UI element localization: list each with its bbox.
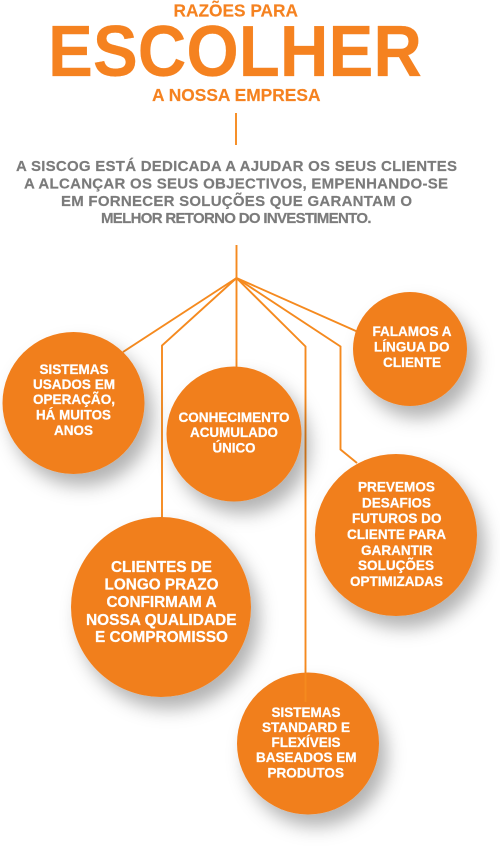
node: clientes de longo prazo [71,517,251,697]
node: clientes de longo prazo: CONFIRMAM A [106,594,216,611]
intro text block: EM FORNECER SOLUÇÕES QUE GARANTAM O [61,192,412,210]
node: sistemas usados em operação: ANOS [54,423,93,438]
node: clientes de longo prazo: CLIENTES DE [111,559,212,576]
title line: razões para: RAZÕES PARA [174,0,298,20]
node: conhecimento acumulado único: ÚNICO [212,440,256,456]
node: clientes de longo prazo: LONGO PRAZO [104,576,218,594]
node: sistemas usados em operação: OPERAÇÃO, [33,392,115,407]
node: sistemas standard e flexíveis: BASEADOS EM [256,750,356,765]
intro text block: MELHOR RETORNO DO INVESTIMENTO. [101,210,372,227]
node: prevemos desafios: SOLUÇÕES [358,556,434,573]
node: prevemos desafios: CLIENTE PARA [347,526,446,542]
connector tree [123,245,357,673]
intro text block: A SISCOG ESTÁ DEDICADA A AJUDAR OS SEUS CLIENTES [16,158,457,175]
node: prevemos desafios: FUTUROS DO [352,510,442,526]
title line: a nossa empresa: A NOSSA EMPRESA [152,85,321,105]
title [48,0,422,105]
intro text block [16,158,457,227]
node: prevemos desafios: DESAFIOS [362,494,431,510]
node: sistemas standard e flexíveis [237,672,379,814]
node: sistemas standard e flexíveis: FLEXÍVEIS [272,735,340,750]
node: sistemas standard e flexíveis: STANDARD E [262,720,350,735]
node: clientes de longo prazo: NOSSA QUALIDADE [86,612,236,629]
node: falamos a língua do cliente: CLIENTE [383,355,441,370]
node: falamos a língua do cliente: FALAMOS A [372,324,452,339]
node: conhecimento acumulado único [166,366,302,502]
node: prevemos desafios [315,454,477,616]
node: conhecimento acumulado único: ACUMULADO [190,425,278,440]
node: falamos a língua do cliente [353,292,467,406]
node: prevemos desafios: PREVEMOS [358,478,435,494]
node: sistemas usados em operação: SISTEMAS [40,362,108,377]
intro text block: A ALCANÇAR OS SEUS OBJECTIVOS, EMPENHANDO-SE [24,176,448,192]
node: sistemas standard e flexíveis: PRODUTOS [268,766,344,780]
node: sistemas usados em operação: HÁ MUITOS [36,408,111,422]
node: clientes de longo prazo: E COMPROMISSO [95,629,228,646]
connector: title to intro [235,113,237,145]
node: sistemas usados em operação [2,332,144,474]
node: falamos a língua do cliente: LÍNGUA DO [374,340,450,354]
node: sistemas standard e flexíveis: SISTEMAS [272,705,340,720]
node: sistemas usados em operação: USADOS EM [33,377,115,392]
node: prevemos desafios: GARANTIR [361,542,432,558]
node: conhecimento acumulado único: CONHECIMENTO [178,410,290,425]
title line: escolher: ESCOLHER [48,12,422,92]
node: prevemos desafios: OPTIMIZADAS [350,573,443,589]
